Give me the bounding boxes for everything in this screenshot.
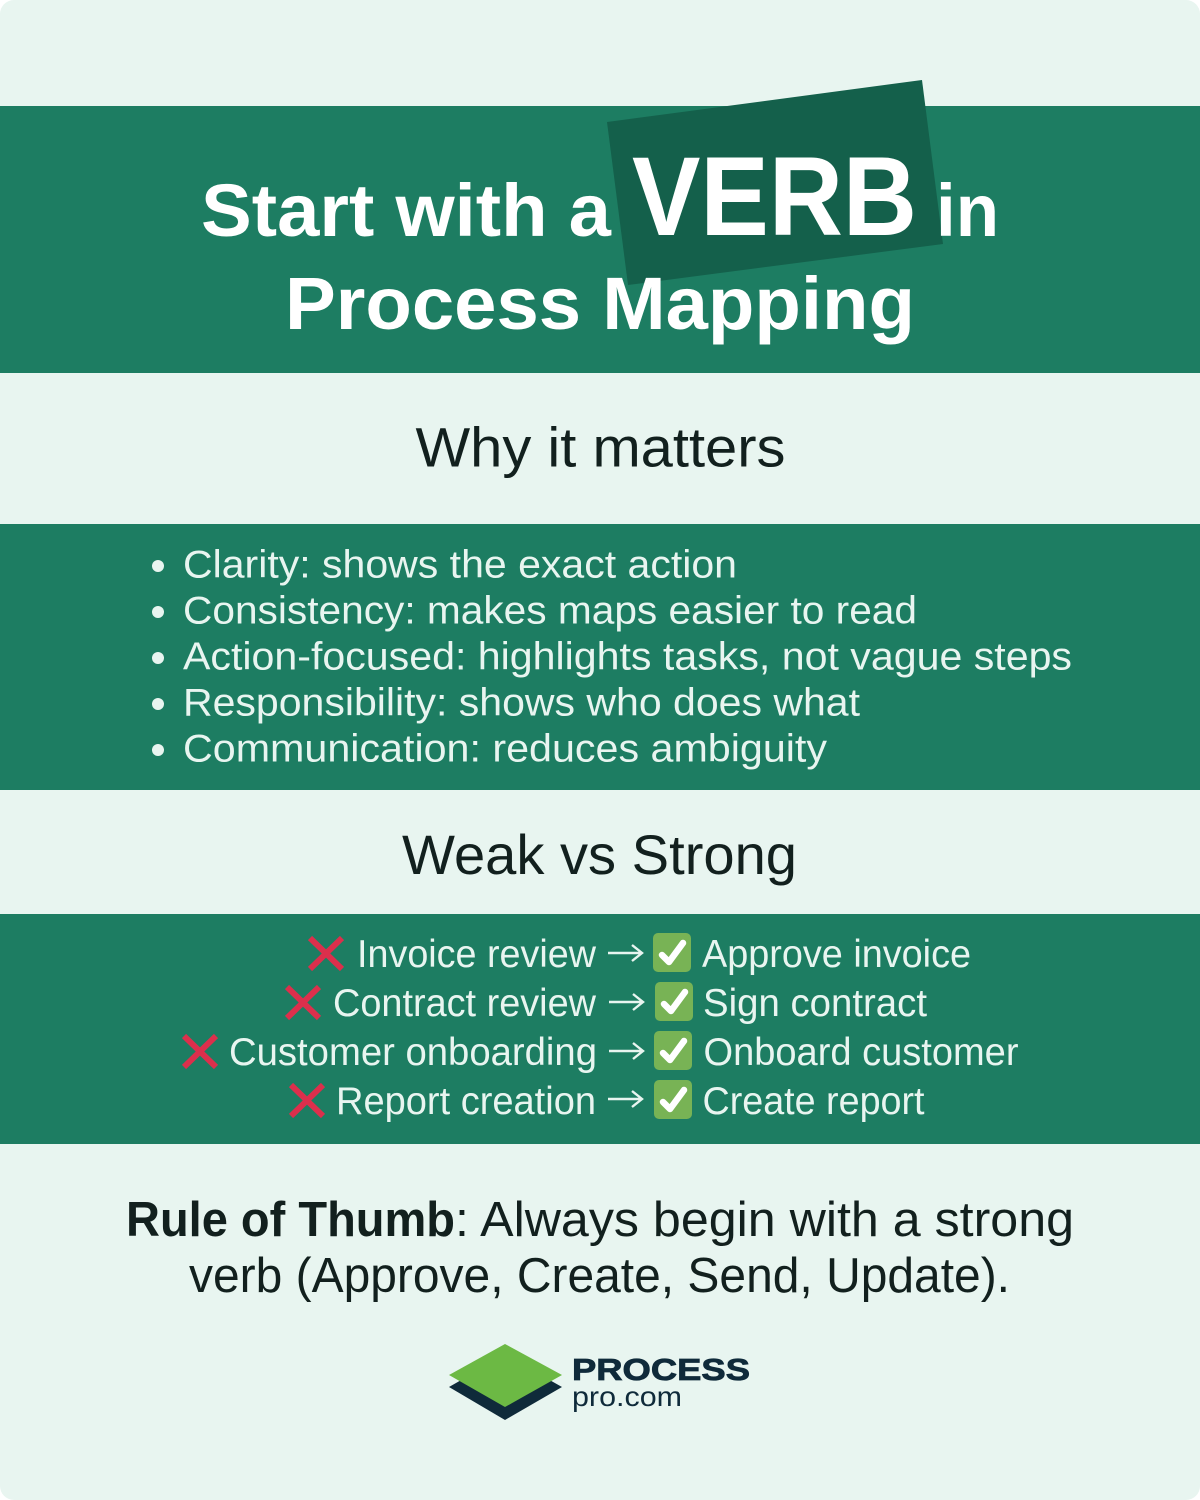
panel: weak vs strong comparison (0, 914, 1200, 1144)
logo: ProcessPro: pro.com (572, 1381, 682, 1412)
strong labels: Approve invoice (702, 933, 971, 976)
weak labels: Report creation (336, 1080, 596, 1123)
weak labels: Customer onboarding (229, 1031, 597, 1074)
reasons text: Communication: reduces ambiguity (183, 728, 828, 770)
heading: why it matters: Why it matters (416, 416, 786, 478)
arrows (608, 945, 643, 1107)
weak labels: Invoice review (357, 933, 597, 976)
strong labels: Sign contract (703, 982, 927, 1025)
bullet points (152, 560, 164, 756)
reasons text: Action-focused: highlights tasks, not vague steps (183, 636, 1072, 678)
title line two: Process Mapping (285, 262, 915, 345)
logo wordmark: PROCESS (572, 1352, 750, 1387)
heading: weak vs strong: Weak vs Strong (402, 823, 797, 886)
strong labels: Create report (702, 1080, 925, 1123)
title line one: VERB (632, 134, 917, 259)
weak labels: Contract review (333, 982, 597, 1025)
strong labels: Onboard customer (704, 1031, 1019, 1074)
logo icon: stacked diamonds (449, 1344, 562, 1420)
panel: reasons list (0, 524, 1200, 790)
reasons text: Consistency: makes maps easier to read (183, 590, 917, 632)
highlight behind VERB (607, 80, 943, 285)
title line one (201, 134, 999, 259)
rule of thumb text: verb (Approve, Create, Send, Update). (189, 1249, 1010, 1303)
rule of thumb text (126, 1193, 1074, 1303)
reasons text: Responsibility: shows who does what (183, 682, 860, 724)
reasons text (183, 544, 1072, 770)
rule of thumb text: : Always begin with a strong (455, 1193, 1074, 1247)
title line one: in (936, 169, 999, 252)
reasons text: Clarity: shows the exact action (183, 544, 737, 586)
title line one: Start with a (201, 169, 612, 252)
panel: title banner (0, 80, 1200, 373)
green check icons (653, 933, 693, 1119)
logo: ProcessPro (449, 1344, 750, 1420)
weak labels (229, 933, 597, 1123)
rule of thumb text: Rule of Thumb (126, 1193, 455, 1247)
red cross icons (184, 938, 342, 1116)
strong labels (702, 933, 1019, 1123)
